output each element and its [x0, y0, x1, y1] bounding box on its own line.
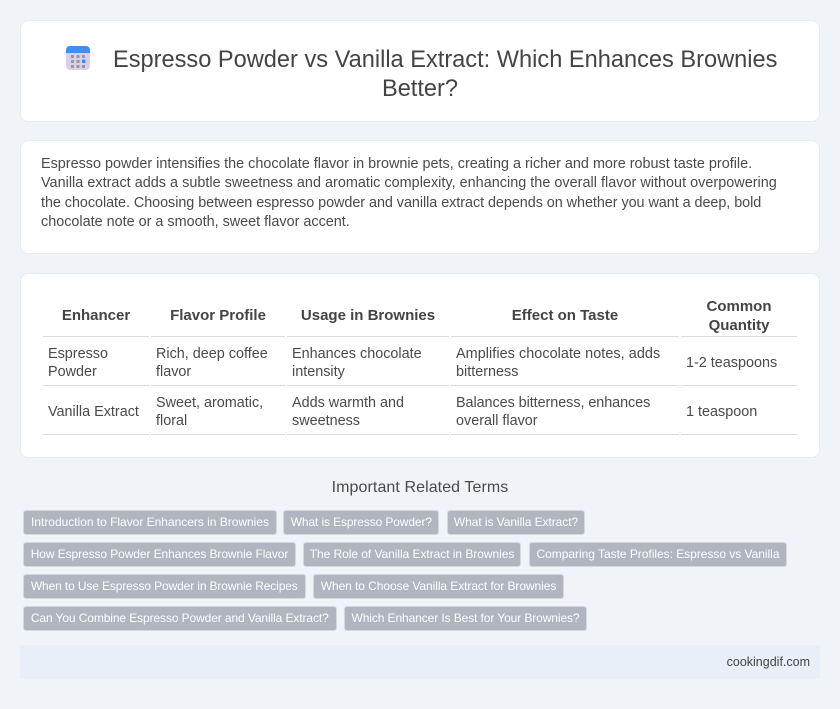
table header: Enhancer: [62, 307, 130, 324]
row: espresso powder: Enhances chocolate: [292, 346, 422, 362]
row: espresso powder: Espresso: [48, 346, 108, 362]
intro text panel: [20, 140, 820, 254]
row: vanilla extract: Sweet, aromatic,: [156, 395, 263, 411]
tag: When to Use Espresso Powder in Brownie Recipes: [31, 579, 298, 593]
row: espresso powder: flavor: [156, 364, 191, 380]
intro paragraph: chocolate note or a smooth, sweet flavor accent.: [41, 214, 350, 230]
tag: What is Vanilla Extract?: [454, 515, 578, 529]
row: vanilla extract: floral: [156, 413, 187, 429]
table header: [62, 298, 772, 334]
intro paragraph: [41, 156, 777, 230]
tag: [283, 510, 439, 535]
tag: Comparing Taste Profiles: Espresso vs Vanilla: [536, 547, 779, 561]
tag: The Role of Vanilla Extract in Brownies: [310, 547, 514, 561]
tag: [447, 510, 585, 535]
row: espresso powder: bitterness: [456, 364, 518, 380]
tag: [313, 574, 564, 599]
header panel: [20, 20, 820, 122]
table header: Common: [706, 298, 772, 315]
tag: What is Espresso Powder?: [291, 515, 432, 529]
title: Better?: [382, 76, 458, 102]
row: espresso powder: Rich, deep coffee: [156, 346, 268, 362]
row: vanilla extract: Adds warmth and: [292, 395, 404, 411]
tag: [529, 542, 787, 567]
row: espresso powder: intensity: [292, 364, 345, 380]
footer credit: cookingdif.com: [727, 655, 810, 669]
tag: [23, 510, 277, 535]
table header: Flavor Profile: [170, 307, 266, 324]
footer bar: [20, 645, 820, 679]
tag: [23, 574, 306, 599]
row: vanilla extract: sweetness: [292, 413, 360, 429]
table panel: [20, 273, 820, 458]
tag: [23, 606, 336, 631]
table header: Usage in Brownies: [301, 307, 435, 324]
row: espresso powder: Powder: [48, 364, 97, 380]
row: vanilla extract: Balances bitterness, enhances: [456, 395, 650, 411]
tag: How Espresso Powder Enhances Brownie Flavor: [31, 547, 288, 561]
row: espresso powder: [48, 346, 777, 380]
title: Espresso Powder vs Vanilla Extract: Which Enhances Brownies: [113, 47, 777, 73]
row: vanilla extract: 1 teaspoon: [686, 404, 757, 420]
table header: Quantity: [709, 317, 769, 334]
row: vanilla extract: [48, 395, 757, 429]
intro paragraph: Vanilla extract adds a subtle sweetness and aromatic complexity, enhancing the overall flavor without overpowering: [41, 175, 777, 191]
tag: Can You Combine Espresso Powder and Vanilla Extract?: [31, 611, 329, 625]
intro paragraph: the chocolate. Choosing between espresso powder and vanilla extract depends on whether you want a deep, bold: [41, 195, 761, 211]
tag: [344, 606, 587, 631]
tag: [23, 542, 296, 567]
row: vanilla extract: Vanilla Extract: [48, 404, 139, 420]
row: espresso powder: Amplifies chocolate notes, adds: [456, 346, 660, 362]
row: vanilla extract: overall flavor: [456, 413, 538, 429]
title: [113, 47, 777, 102]
icon: calendar: [66, 46, 90, 70]
tag: [303, 542, 521, 567]
tag: Introduction to Flavor Enhancers in Brownies: [31, 515, 269, 529]
comparison table: [43, 298, 797, 435]
related terms heading: Important Related Terms: [332, 479, 508, 496]
table header: Effect on Taste: [512, 307, 618, 324]
tag: Which Enhancer Is Best for Your Brownies?: [351, 611, 580, 625]
tag: When to Choose Vanilla Extract for Brownies: [321, 579, 556, 593]
related terms tags: [23, 510, 787, 631]
intro paragraph: Espresso powder intensifies the chocolate flavor in brownie pets, creating a richer and more robust taste profile.: [41, 156, 752, 172]
row: espresso powder: 1-2 teaspoons: [686, 355, 777, 371]
